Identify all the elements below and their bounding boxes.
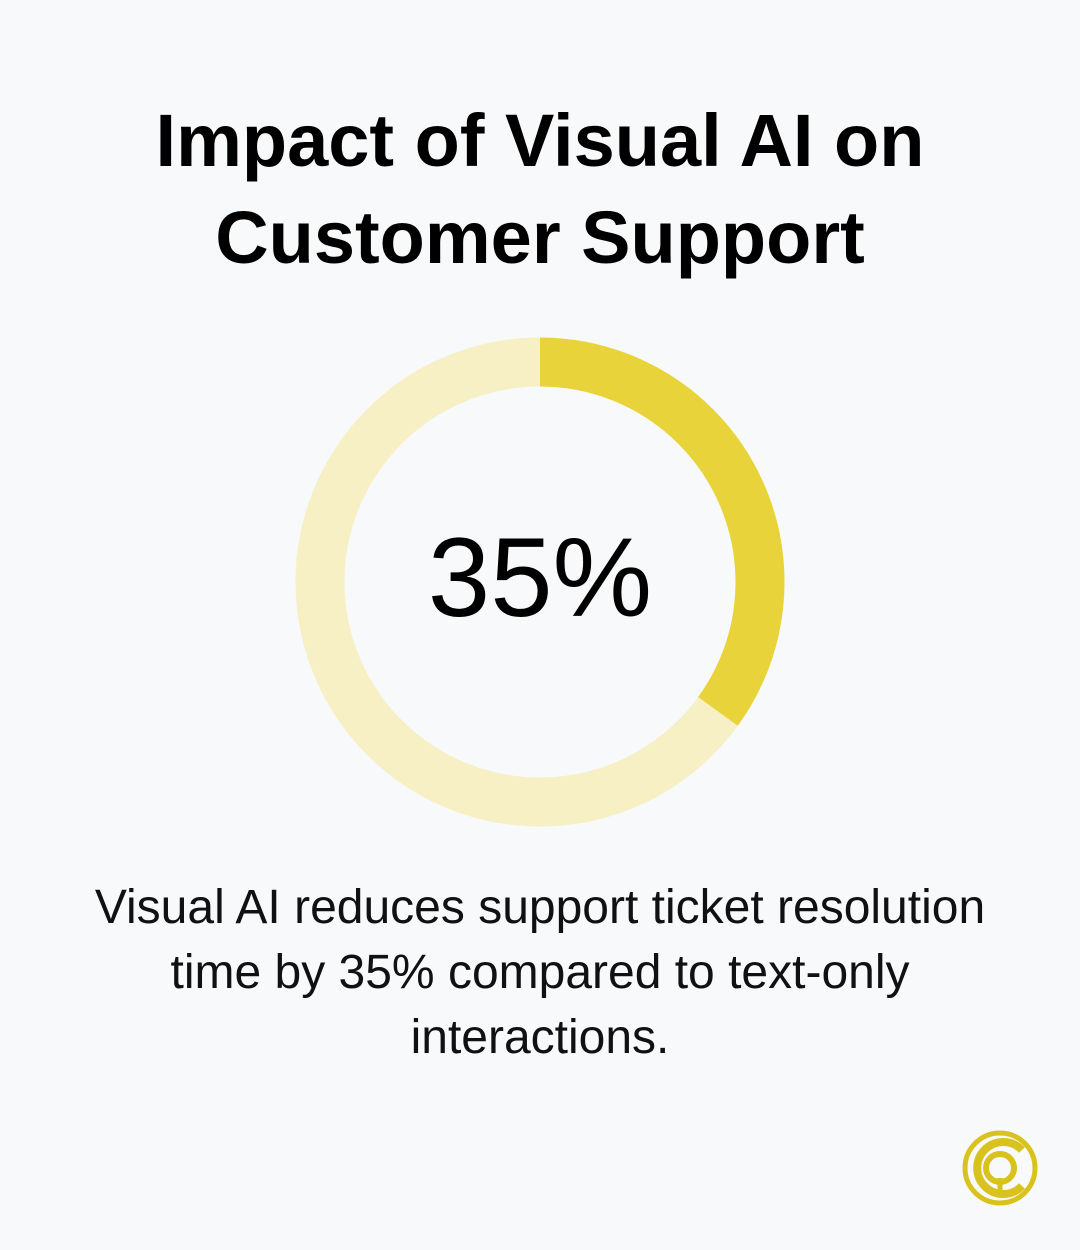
icon: logo: [962, 1130, 1038, 1206]
title: Impact of Visual AI on: [156, 99, 924, 182]
description text: Visual AI reduces support ticket resolution time by 35% compared to text-only interactions.: [95, 881, 985, 1064]
title: Customer Support: [215, 196, 865, 279]
title: [156, 99, 924, 279]
donut chart: 35%: [428, 515, 652, 640]
